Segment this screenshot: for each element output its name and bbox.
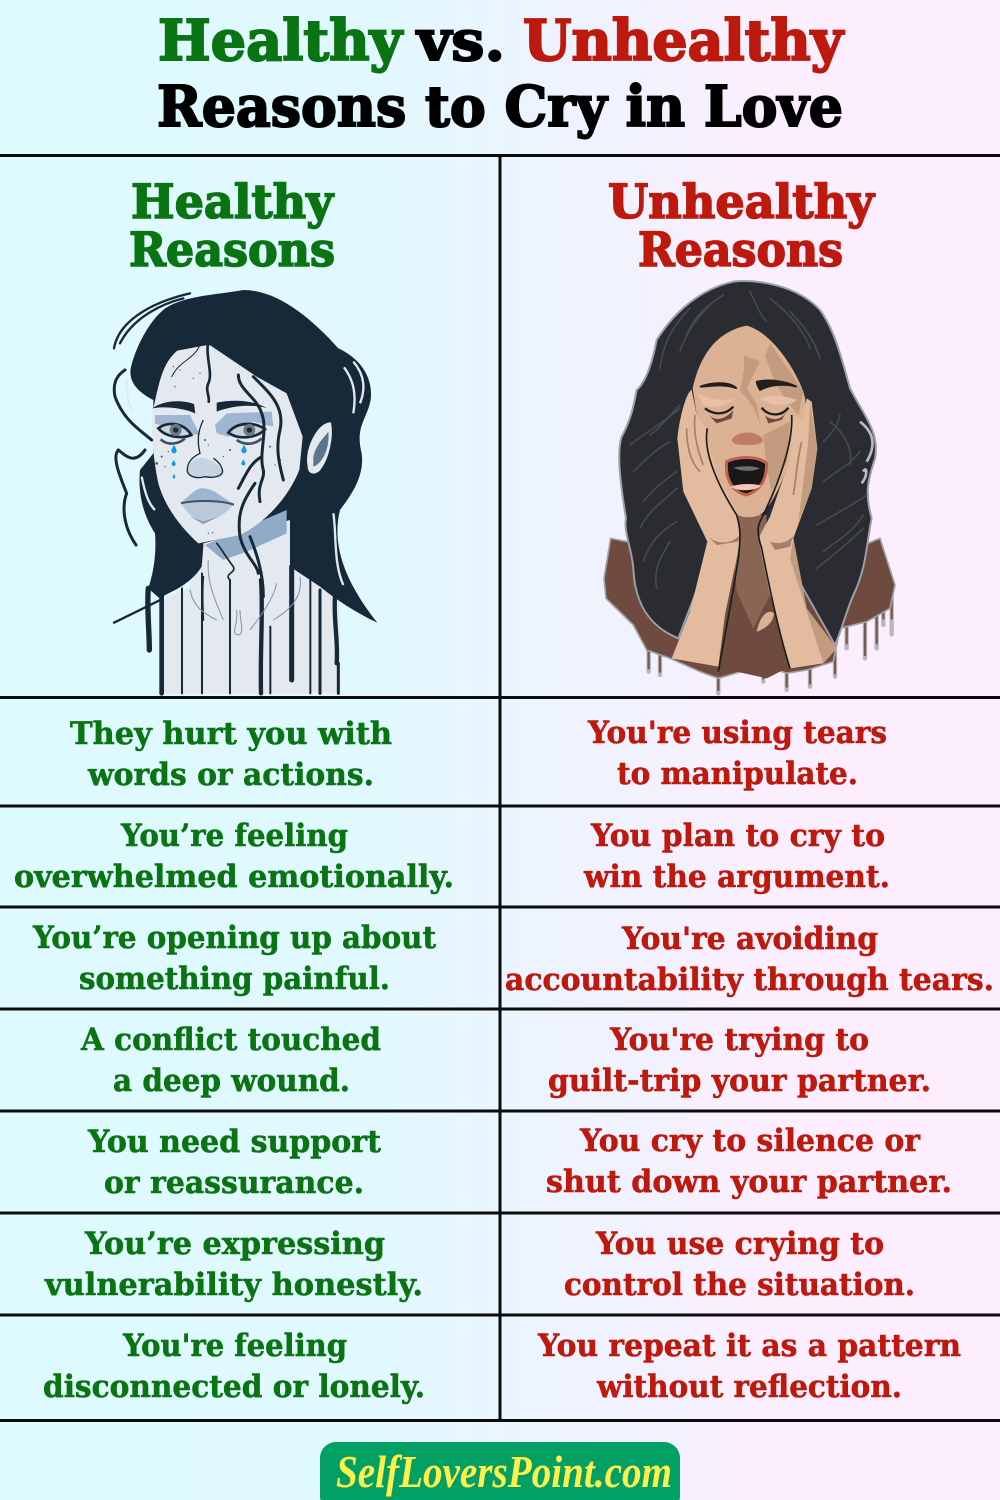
title: Unhealthy [523,8,844,74]
heading: healthy reasons: Healthy [131,175,335,230]
heading: unhealthy reasons [608,175,876,278]
row 3: healthy: something painful. [79,961,390,997]
row 3: healthy [32,920,437,997]
row 7: healthy: You're feeling [122,1328,347,1364]
title: Reasons to Cry in Love [157,74,843,140]
row 4: healthy: A conflict touched [80,1022,381,1058]
illustration: sobbing woman, unhealthy [604,281,895,693]
row 5: unhealthy [546,1123,952,1200]
row 2: healthy [14,818,454,895]
row 6: unhealthy: control the situation. [564,1267,915,1303]
row 1: healthy [70,716,392,793]
row 6: unhealthy: You use crying to [595,1226,884,1262]
row 6: healthy: vulnerability honestly. [44,1267,423,1303]
row 3: unhealthy: accountability through tears. [505,962,994,998]
row 4: healthy [80,1022,381,1099]
row 2: unhealthy: You plan to cry to [590,818,885,854]
row 3: unhealthy: You're avoiding [621,921,878,957]
row 4: unhealthy: You're trying to [609,1022,869,1058]
row 1: healthy: They hurt you with [70,716,392,752]
row 5: unhealthy: shut down your partner. [546,1164,952,1200]
row 3: healthy: You’re opening up about [32,920,437,956]
row 7: unhealthy: without reflection. [596,1369,902,1405]
row 3: unhealthy [505,921,994,998]
row 5: healthy: or reassurance. [104,1165,364,1201]
heading: unhealthy reasons: Unhealthy [608,175,876,230]
row 5: healthy: You need support [87,1124,382,1160]
title: vs. [415,8,505,74]
illustration: crying woman, healthy [114,290,377,693]
title [157,8,844,140]
heading: healthy reasons: Reasons [129,223,335,278]
row 6: unhealthy [564,1226,915,1303]
row 6: healthy: You’re expressing [84,1226,385,1262]
title: Healthy [158,8,403,74]
heading: unhealthy reasons: Reasons [638,223,843,278]
row 7: healthy: disconnected or lonely. [43,1369,425,1405]
row 6: healthy [44,1226,423,1303]
row 2: healthy: You’re feeling [120,818,348,854]
row 1: unhealthy: You're using tears [587,715,887,751]
row 2: unhealthy [583,818,890,895]
row 1: healthy: words or actions. [87,757,374,793]
row 1: unhealthy [587,715,887,792]
row 7: unhealthy [537,1328,961,1405]
row 5: unhealthy: You cry to silence or [579,1123,921,1159]
row 7: healthy [43,1328,425,1405]
row 4: unhealthy [548,1022,931,1099]
row 1: unhealthy: to manipulate. [617,756,858,792]
row 2: unhealthy: win the argument. [583,859,890,895]
footer brand badge: SelfLoversPoint.com [336,1446,672,1497]
row 4: unhealthy: guilt-trip your partner. [548,1063,931,1099]
row 7: unhealthy: You repeat it as a pattern [537,1328,961,1364]
row 5: healthy [87,1124,382,1201]
row 4: healthy: a deep wound. [113,1063,350,1099]
heading: healthy reasons [129,175,335,278]
row 2: healthy: overwhelmed emotionally. [14,859,454,895]
